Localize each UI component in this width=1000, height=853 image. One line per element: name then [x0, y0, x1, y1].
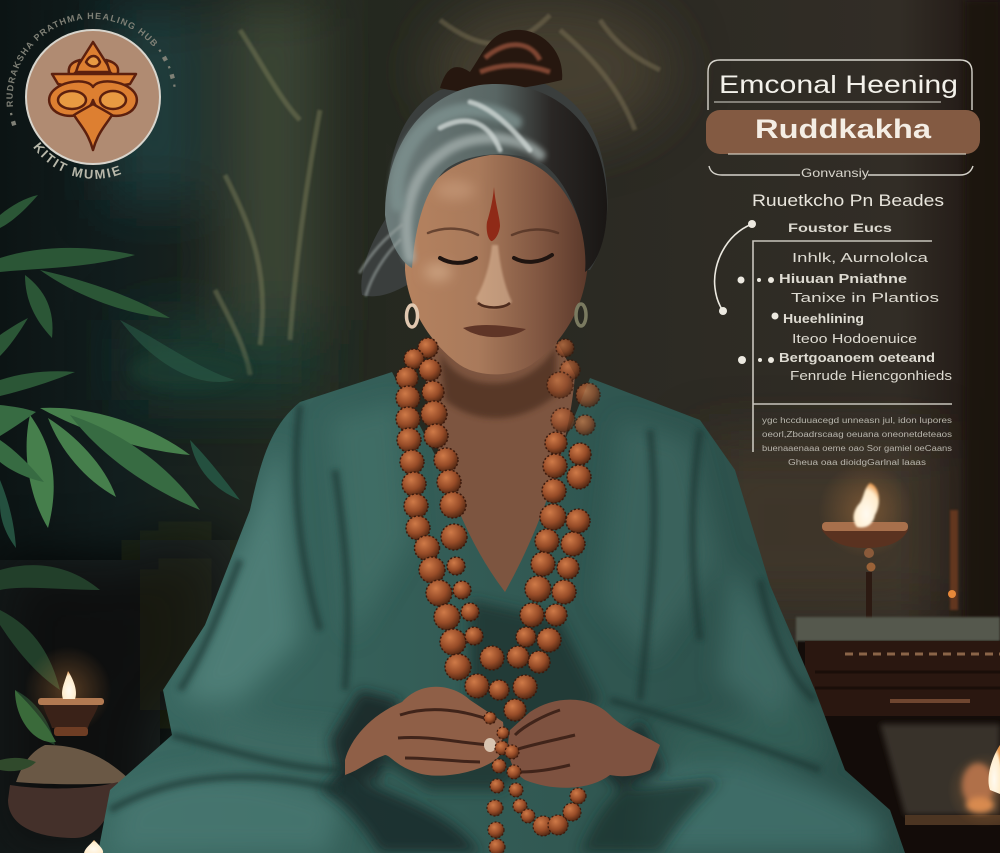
hands	[345, 687, 660, 788]
fine print: Gheua oaa dioidgGarlnal laaas	[788, 458, 926, 467]
logo ring text: ■ ▪ RUDRAKSHA PRATHMA HEALING HUB ▪ ■ ▪ ■ ▪	[6, 12, 176, 144]
robe	[98, 372, 905, 853]
shaded right strand beads	[504, 339, 600, 721]
title heading: Emconal Heening	[719, 71, 958, 99]
panel frame lines	[753, 241, 952, 452]
hanging bead strand	[484, 712, 586, 853]
neck shadow	[440, 345, 556, 418]
benefit list: Inhlk, Aurnololca	[792, 250, 929, 265]
title frame	[708, 60, 973, 175]
fine print: buenaaenaaa oeme oao Sor gamiel oeCaans	[762, 444, 952, 453]
benefit list: Hueehlining	[783, 311, 864, 326]
fine print: ygc hccduuacegd unneasn jul, idon lupores	[762, 416, 952, 425]
title panel	[706, 60, 980, 180]
benefit list: Iteoo Hodoenuice	[792, 331, 917, 346]
hair back	[361, 30, 607, 296]
rudraksha beads	[396, 338, 509, 700]
benefit list: Bertgoanoem oeteand	[779, 350, 935, 365]
nose and lips	[463, 245, 526, 337]
earrings	[406, 304, 586, 327]
hair strands	[360, 102, 540, 295]
wooden table	[796, 617, 1000, 853]
eyes and brows	[428, 229, 558, 263]
tilak mark	[487, 187, 500, 241]
face	[405, 155, 588, 374]
chest and neck	[425, 340, 575, 592]
benefit list	[779, 250, 953, 383]
benefit list: Hiuuan Pniathne	[779, 271, 907, 286]
left candle and brass pot	[0, 646, 132, 838]
arc connector	[715, 220, 756, 315]
banner title: Ruddkakha	[755, 114, 932, 144]
meditating woman	[98, 30, 905, 853]
bullet markers	[738, 276, 778, 364]
plant leaves	[0, 195, 250, 745]
logo bottom text: KITIT MUMIE	[33, 142, 122, 179]
right candle on stand	[818, 462, 914, 620]
fine print: oeorl,Zboadrscaag oeuana oneonetdeteaos	[762, 430, 952, 439]
hair front	[385, 84, 607, 272]
face highlights	[424, 180, 475, 281]
panel subheading: Foustor Eucs	[788, 221, 892, 235]
logo disc	[26, 30, 160, 164]
benefits panel	[715, 191, 953, 467]
title banner	[706, 110, 980, 154]
logo emblem	[49, 42, 137, 150]
fine print	[762, 416, 952, 467]
panel heading: Ruuetkcho Pn Beades	[752, 191, 944, 210]
logo badge	[6, 12, 176, 179]
bottom candles	[84, 745, 1000, 853]
small subtitle: Gonvansiy	[801, 166, 869, 180]
benefit list: Tanixe in Plantios	[791, 290, 940, 305]
benefit list: Fenrude Hiencgonhieds	[790, 368, 953, 383]
